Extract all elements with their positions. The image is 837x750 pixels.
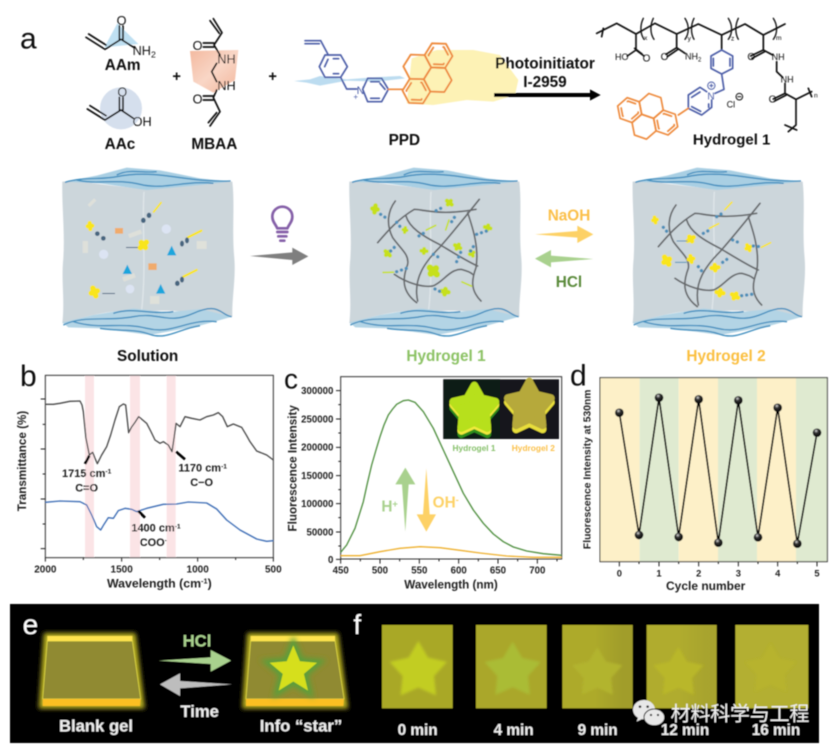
y axis title: Fluorescence Intensity at 530nm <box>583 390 594 549</box>
x axis labels: 1500 <box>111 565 133 576</box>
molecule: AAm: O <box>117 14 127 28</box>
y axis labels: 100000 <box>301 499 333 510</box>
y axis labels: 50000 <box>306 527 333 538</box>
annotation: 1715 C=O: -1 <box>105 469 112 476</box>
panel b: FTIR spectra <box>16 360 282 590</box>
gel: blank <box>43 636 141 706</box>
x axis labels: 700 <box>529 566 545 577</box>
panel letter a: a <box>20 23 37 56</box>
annotation: 1170 C-O: -1 <box>221 463 227 470</box>
x axis labels: 500 <box>265 565 282 576</box>
photo: 12 min <box>647 625 717 708</box>
panel letter b: b <box>20 360 37 393</box>
label: 0 min: 0 min <box>398 722 438 739</box>
plus sign: + <box>268 69 277 85</box>
y axis labels: 0 <box>328 555 333 566</box>
x axis labels: 4 <box>775 568 781 578</box>
x axis title: Wavelength (cm <box>107 576 201 590</box>
inset label: Hydrogel 1: Hydrogel 1 <box>452 443 496 453</box>
data points <box>615 393 821 548</box>
label: Time: Time <box>180 702 219 721</box>
label: Info star: Info “star” <box>260 717 342 736</box>
x axis labels: 2000 <box>34 565 57 576</box>
cycle bands <box>600 378 827 562</box>
x axis labels: 550 <box>411 566 427 577</box>
annotation: 1170 C-O: 1170 cm <box>178 463 221 475</box>
label: HCl: HCl <box>556 274 582 291</box>
label: HCl: HCl <box>183 632 211 651</box>
x axis labels <box>333 566 545 577</box>
panel a: hydrogel state cubes <box>62 168 805 365</box>
highlighted bands <box>85 376 176 558</box>
molecule: PPD <box>294 37 518 149</box>
arrow: NaOH forward <box>535 226 593 243</box>
photo: 16 min <box>735 625 808 708</box>
molecule: PPD: + <box>353 92 358 101</box>
molecule: MBAA: O <box>193 39 203 53</box>
x axis title: -1 <box>201 576 208 585</box>
annotation: 1400 COO-: - <box>165 538 167 545</box>
molecule: Hydrogel 1 polymer <box>597 18 818 149</box>
y axis labels: 200000 <box>301 443 333 454</box>
molecule: Hydrogel 1 polymer: O <box>661 52 669 63</box>
label: OH-: OH <box>433 495 456 512</box>
molecule: Hydrogel 1 polymer: z <box>731 36 734 43</box>
inset photo: gel stars <box>443 379 559 439</box>
molecule: AAc: OH <box>133 115 152 129</box>
molecule: PPD: PPD <box>389 132 420 149</box>
x axis labels: 500 <box>372 566 388 577</box>
x axis labels: 0 <box>617 568 622 578</box>
molecule: MBAA: O <box>193 92 203 106</box>
molecule: MBAA: MBAA <box>191 136 237 153</box>
panel a: reactants and reaction scheme <box>20 14 818 153</box>
y axis title: Fluorescence Intensity <box>287 405 300 531</box>
x axis labels <box>617 568 820 578</box>
molecule: Hydrogel 1 polymer: NH <box>685 51 698 61</box>
curve: Hydrogel 2 <box>341 547 562 557</box>
molecule: AAc: O <box>117 86 127 100</box>
molecule: Hydrogel 1 polymer: n <box>814 92 818 99</box>
annotation: 1715 C=O <box>62 456 112 494</box>
label: 4 min: 4 min <box>494 722 534 739</box>
molecule: Hydrogel 1 polymer: NH <box>772 52 785 62</box>
photo: 9 min <box>562 625 633 708</box>
arrow: reaction <box>494 89 601 101</box>
panel letter f: f <box>353 609 361 640</box>
label: 16 min: 16 min <box>752 722 800 739</box>
molecule: Hydrogel 1 polymer: x <box>644 35 648 42</box>
molecule: AAm: NH <box>133 44 151 58</box>
molecule: Hydrogel 1 polymer: O <box>747 52 755 63</box>
molecule: Hydrogel 1 polymer: y <box>688 36 692 43</box>
y axis title: Transmittance (%) <box>16 411 29 511</box>
x axis labels: 1 <box>656 568 662 578</box>
label: Blank gel: Blank gel <box>59 717 133 736</box>
spectrum: blue <box>45 501 273 541</box>
arrow: Time <box>160 673 232 696</box>
photo: 0 min <box>382 625 453 708</box>
cube: Hydrogel 1 <box>349 168 522 336</box>
annotation: 1400 COO- <box>131 511 181 549</box>
molecule: Hydrogel 1 polymer: Hydrogel 1 <box>693 132 770 149</box>
x axis title: ) <box>208 576 212 590</box>
label: Hydrogel 2: Hydrogel 2 <box>686 348 766 365</box>
inset label: Hydrogel 2: Hydrogel 2 <box>512 443 555 453</box>
annotation: 1170 C-O: C−O <box>190 477 214 489</box>
photoinitiator label <box>495 55 595 91</box>
x axis labels: 1000 <box>187 565 209 576</box>
gel: info star <box>246 636 344 706</box>
spectrum: black <box>45 401 273 464</box>
molecule: AAc <box>87 86 152 153</box>
annotation: 1170 C-O <box>176 452 227 489</box>
molecule: AAm: AAm <box>105 57 141 74</box>
molecule: PPD: N <box>357 85 364 97</box>
molecule: Hydrogel 1 polymer: NH <box>781 74 794 84</box>
molecule: AAm: 2 <box>151 50 156 60</box>
arrow: OH- down <box>417 468 436 532</box>
x axis title: Cycle number <box>666 579 746 593</box>
photoinitiator label: I-2959 <box>523 74 567 91</box>
x axis labels: 3 <box>736 568 741 578</box>
panel letter c: c <box>284 364 298 395</box>
plot frame and ticks <box>41 375 273 562</box>
annotation: 1400 COO-: 1400 cm <box>131 523 175 535</box>
molecule: Hydrogel 1 polymer: Cl <box>727 99 735 109</box>
photoinitiator label: Photoinitiator <box>495 55 595 72</box>
cube: Solution <box>62 168 235 336</box>
icon: chat bubbles watermark <box>633 700 665 726</box>
plus sign: + <box>172 69 181 85</box>
data line <box>619 398 817 544</box>
icon: light bulb <box>272 207 292 241</box>
x axis labels: 2 <box>696 568 701 578</box>
arrow: HCl reverse <box>535 250 593 267</box>
arrow: gray light reaction <box>250 248 308 265</box>
label: H+: + <box>392 499 398 509</box>
panel letter d: d <box>570 360 587 393</box>
x axis labels <box>34 565 282 576</box>
molecule: Hydrogel 1 polymer: N <box>707 91 715 102</box>
molecule: Hydrogel 1 polymer: HO <box>615 52 628 62</box>
label: OH-: - <box>456 495 459 505</box>
molecule: Hydrogel 1 polymer: O <box>643 53 651 64</box>
x axis labels: 650 <box>490 566 506 577</box>
panel: black background for e and f <box>10 604 819 743</box>
y axis labels <box>301 386 333 566</box>
y axis labels: 300000 <box>301 386 333 397</box>
plot frame and ticks <box>336 377 562 564</box>
label: 9 min: 9 min <box>578 722 618 739</box>
curve: Hydrogel 1 <box>341 400 562 555</box>
label: Hydrogel 1: Hydrogel 1 <box>406 348 486 365</box>
cube: Hydrogel 2 <box>633 168 805 336</box>
annotation: 1400 COO-: -1 <box>175 523 181 530</box>
panel d: cycling chart <box>570 360 827 593</box>
molecule: Hydrogel 1 polymer: O <box>769 95 777 106</box>
molecule: AAm <box>86 14 156 74</box>
annotation: 1400 COO-: COO <box>140 537 165 549</box>
label: Solution: Solution <box>117 348 178 365</box>
panel f: fading star photo series <box>382 625 809 739</box>
label: NaOH: NaOH <box>548 208 590 225</box>
y axis labels: 250000 <box>301 414 333 425</box>
x axis labels: 600 <box>451 566 467 577</box>
y axis labels: 150000 <box>301 471 333 482</box>
arrow: HCl <box>158 650 231 672</box>
annotation: 1715 C=O: C=O <box>75 482 99 494</box>
panel letter e: e <box>23 609 38 640</box>
molecule: Hydrogel 1 polymer: 2 <box>698 57 702 63</box>
molecule: AAc: AAc <box>105 136 136 153</box>
label: 12 min: 12 min <box>661 722 709 739</box>
annotation: 1715 C=O: 1715 cm <box>62 468 105 480</box>
panel c: fluorescence spectra <box>284 364 562 592</box>
molecule: Hydrogel 1 polymer: m <box>776 35 782 42</box>
photo: 4 min <box>476 625 547 708</box>
x axis labels: 5 <box>814 568 820 578</box>
plot frame and ticks <box>600 378 827 566</box>
arrow: H+ up <box>395 468 415 532</box>
molecule: MBAA <box>190 19 238 153</box>
panel e: blank gel to info star <box>23 609 361 736</box>
x axis title: Wavelength (nm) <box>404 579 498 592</box>
molecule: MBAA: NH <box>217 79 236 93</box>
molecule: MBAA: NH <box>217 52 236 66</box>
x axis labels: 450 <box>333 566 349 577</box>
watermark text: 材料科学与工程 <box>671 703 809 726</box>
label: H+: H <box>381 499 392 516</box>
